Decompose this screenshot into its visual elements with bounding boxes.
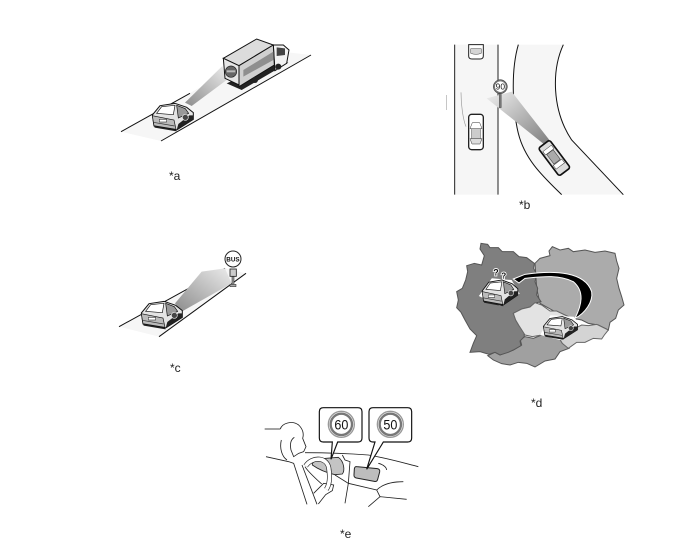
country: Germany: [457, 243, 541, 355]
driver: [265, 423, 334, 504]
car confused: [480, 279, 518, 306]
curved road: [513, 45, 623, 195]
truck: [223, 39, 289, 90]
road: [119, 268, 246, 337]
straight road: [447, 45, 498, 195]
question marks: ?: [493, 268, 499, 278]
callout 50: 50: [383, 417, 398, 432]
label a: *a: [169, 169, 181, 183]
meter display: [312, 457, 344, 475]
dashboard: [305, 453, 418, 507]
question marks: ?: [501, 271, 506, 281]
country: Poland: [535, 247, 624, 330]
panel a: car following truck: [121, 39, 311, 141]
panel e: driver with displays: [265, 408, 418, 507]
label b: *b: [519, 198, 531, 212]
steering wheel: [305, 459, 330, 489]
bus sign: BUS: [226, 256, 240, 263]
speed sign 90: [493, 80, 507, 108]
head-up display: [354, 467, 380, 481]
oncoming car top: [469, 45, 483, 59]
curved arrow: [513, 272, 592, 318]
label d: *d: [531, 396, 542, 410]
label e: *e: [340, 527, 352, 541]
panel b: speed sign recognition: [447, 45, 623, 195]
callout 60: [319, 408, 362, 459]
ego car: [538, 140, 570, 176]
callout 50: [367, 408, 412, 469]
car: [141, 301, 182, 329]
panel d: map with border crossing: [457, 243, 624, 367]
label c: *c: [170, 361, 181, 375]
panel c: bus sign: [119, 251, 246, 337]
country: Austria: [488, 335, 569, 367]
camera beam: [175, 268, 232, 312]
callout 60: 60: [334, 417, 349, 432]
car at home: [542, 316, 578, 340]
question marks: [493, 268, 506, 281]
country: Slovakia: [558, 324, 608, 348]
car: [152, 103, 193, 131]
oncoming car lower: [469, 114, 483, 150]
speed sign 90: 90: [496, 82, 505, 92]
road: [121, 50, 311, 141]
country: Czechia: [513, 303, 576, 337]
camera beam: [487, 92, 551, 145]
camera beam: [185, 66, 227, 106]
